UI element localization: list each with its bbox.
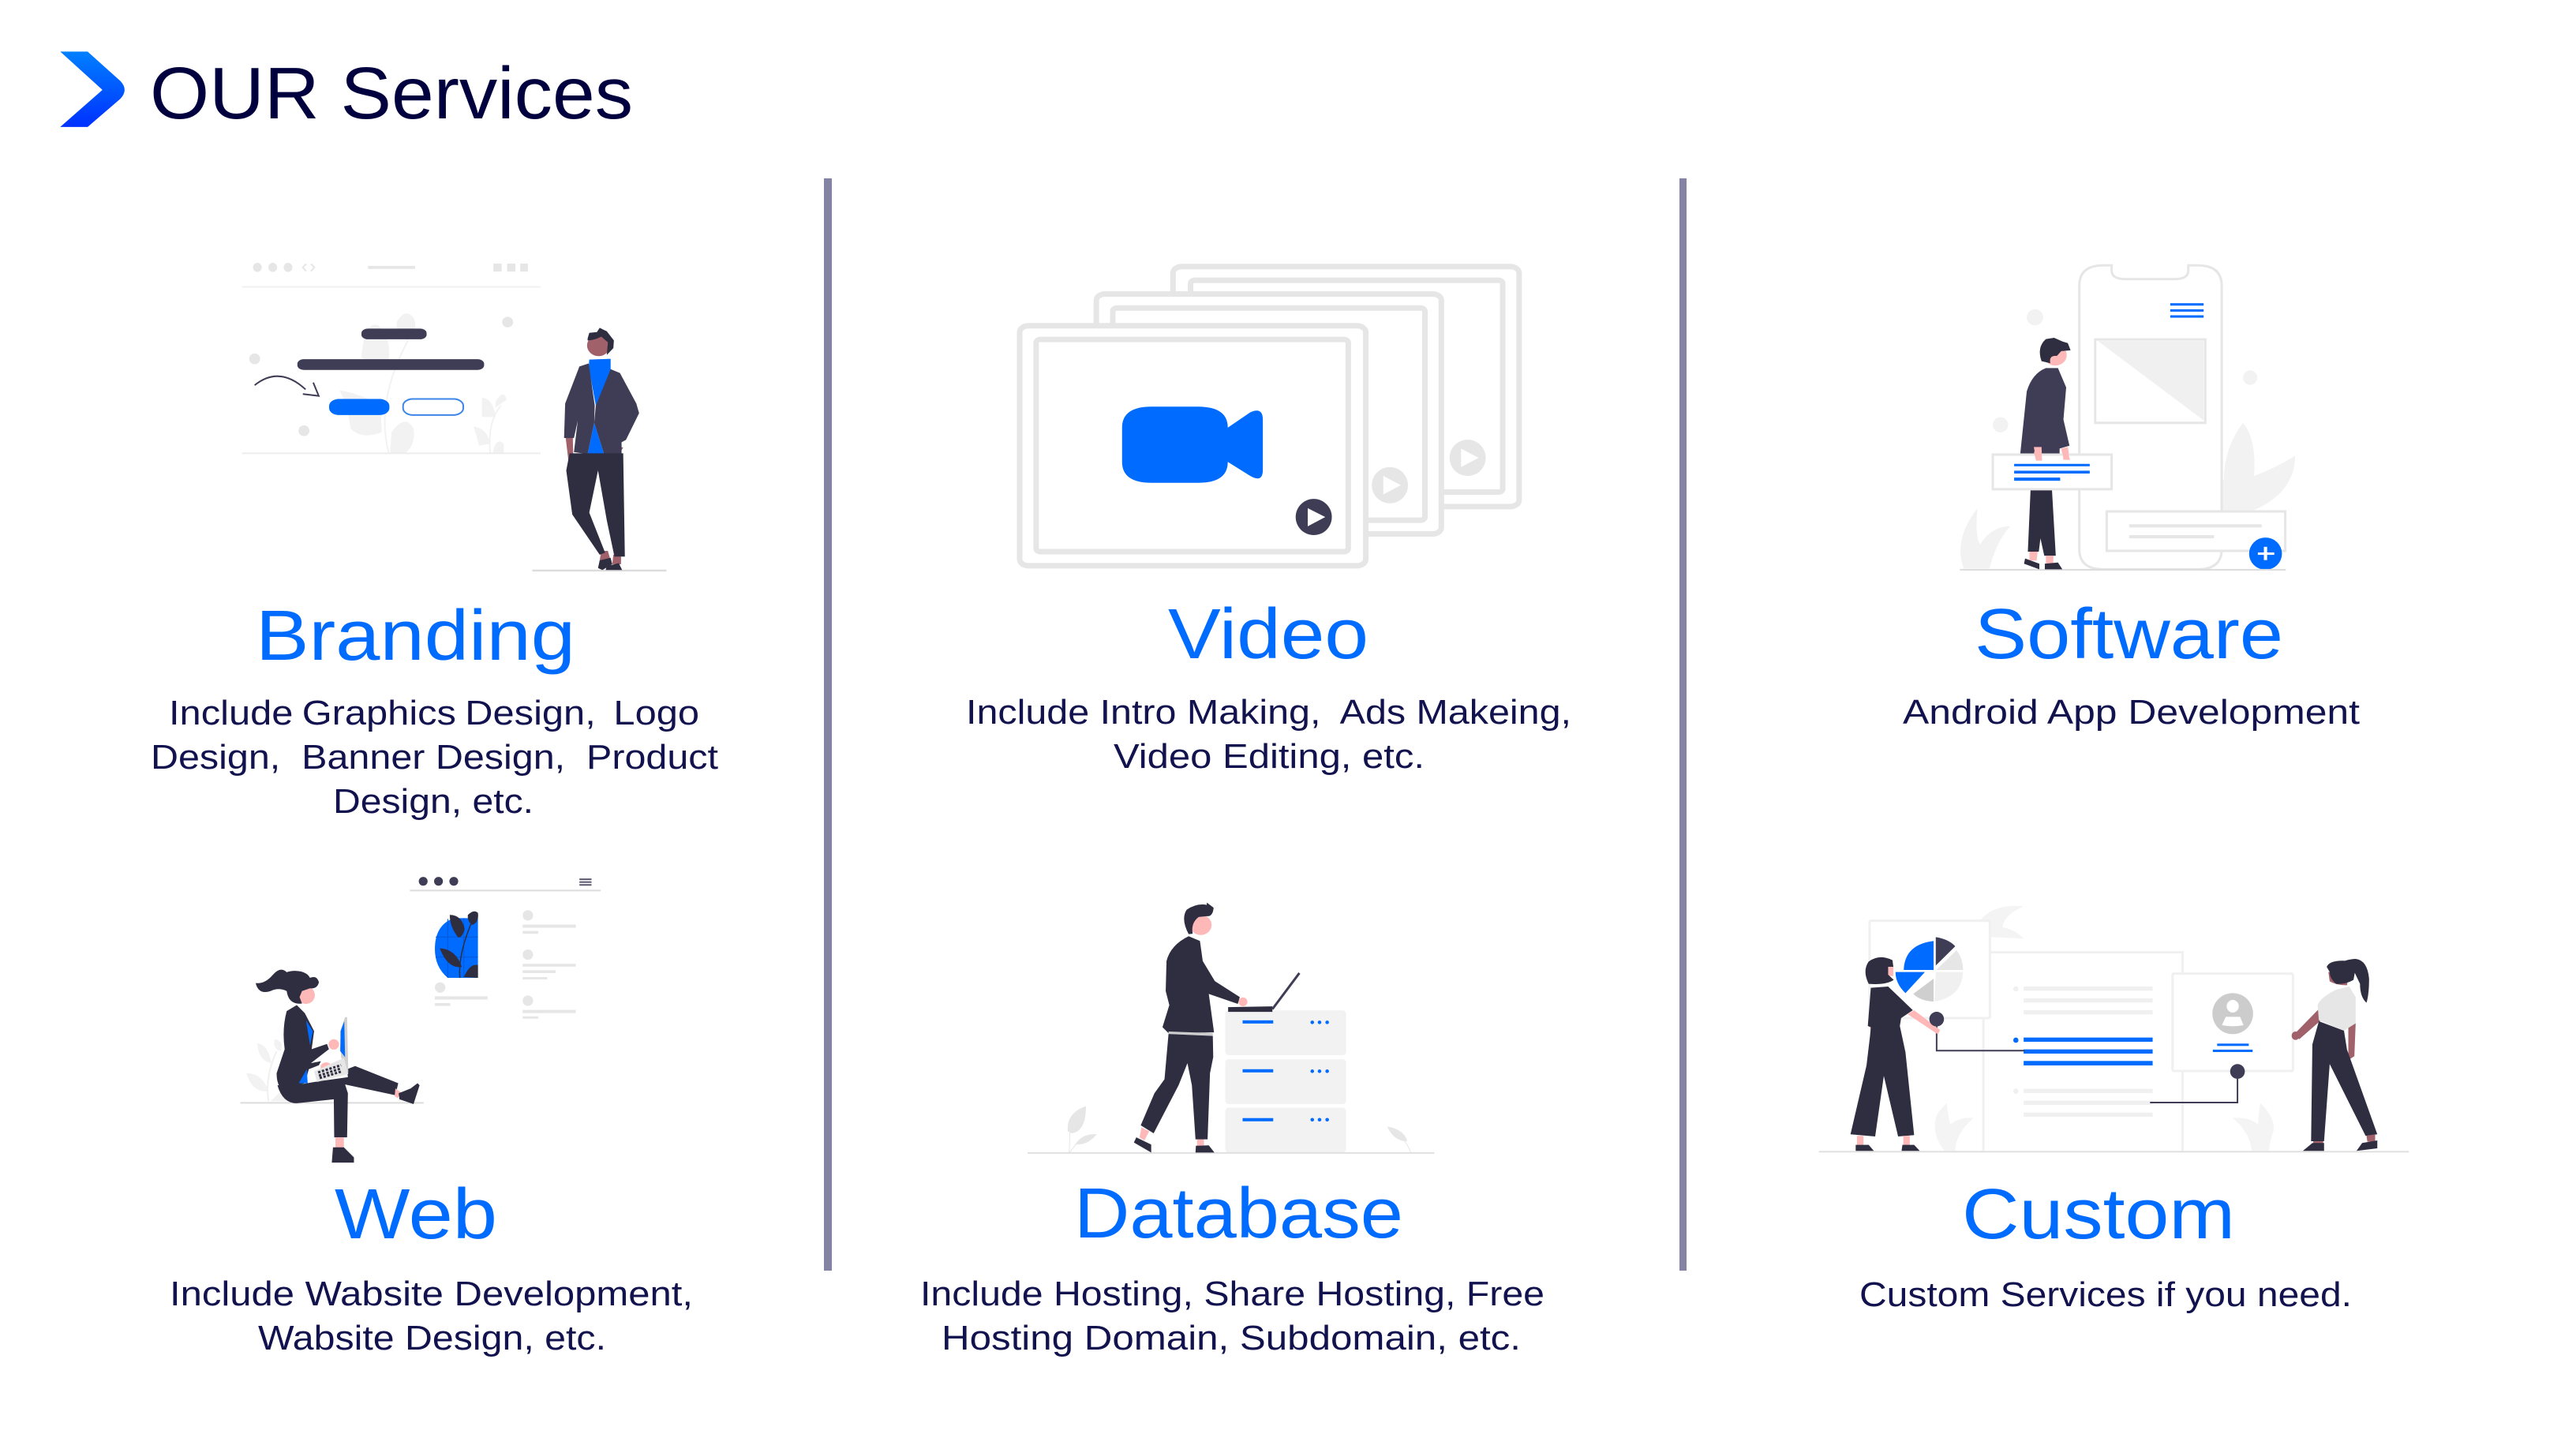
illustration: branding landing page and standing man	[242, 263, 666, 571]
heading: web: Web	[335, 1175, 497, 1254]
text: branding description: Design, etc.	[333, 782, 534, 821]
panel: video	[966, 267, 1571, 776]
illustration: phone and man with cards	[1960, 265, 2295, 571]
text: branding description: Design, Banner Design, Product	[151, 738, 718, 777]
illustration: video frames	[1020, 267, 1519, 566]
text: web description: Include Wabsite Development,	[170, 1275, 693, 1313]
icon: play button	[1296, 499, 1332, 535]
text: branding description: Include Graphics Design, Logo	[169, 694, 699, 732]
heading: video: Video	[1168, 595, 1368, 674]
heading: software: Software	[1975, 595, 2283, 674]
illustration: woman with laptop and web page	[241, 877, 601, 1163]
panel: custom	[1819, 906, 2409, 1314]
title: OUR Services	[150, 52, 633, 134]
text: database description	[920, 1275, 1544, 1357]
panel: web	[170, 877, 693, 1357]
text: video description	[966, 693, 1571, 776]
icon: profile avatar	[2212, 993, 2253, 1034]
icon: video camera	[1122, 406, 1263, 483]
text: branding description	[151, 694, 718, 821]
text: web description	[170, 1275, 693, 1357]
heading: custom: Custom	[1962, 1175, 2235, 1254]
text: video description: Include Intro Making, Ads Makeing,	[966, 693, 1571, 732]
panel: database	[920, 903, 1544, 1357]
panel: branding	[151, 263, 718, 821]
text: database description: Include Hosting, Share Hosting, Free	[920, 1275, 1544, 1313]
heading: branding: Branding	[256, 597, 575, 676]
icon: plus button	[2249, 537, 2282, 570]
divider: left	[824, 178, 832, 1271]
heading: database: Database	[1074, 1174, 1403, 1253]
illustration: two women with chart and profile cards	[1819, 906, 2409, 1152]
divider: right	[1679, 178, 1687, 1271]
text: custom description: Custom Services if you need.	[1859, 1275, 2352, 1314]
icon: chevron	[60, 51, 125, 127]
text: database description: Hosting Domain, Subdomain, etc.	[942, 1319, 1521, 1357]
illustration: man with laptop at servers	[1028, 903, 1434, 1154]
text: video description: Video Editing, etc.	[1114, 737, 1425, 776]
text: web description: Wabsite Design, etc.	[258, 1319, 606, 1357]
panel: software	[1903, 265, 2360, 732]
text: software description: Android App Development	[1903, 693, 2360, 732]
chart: pie	[1896, 937, 1963, 1002]
